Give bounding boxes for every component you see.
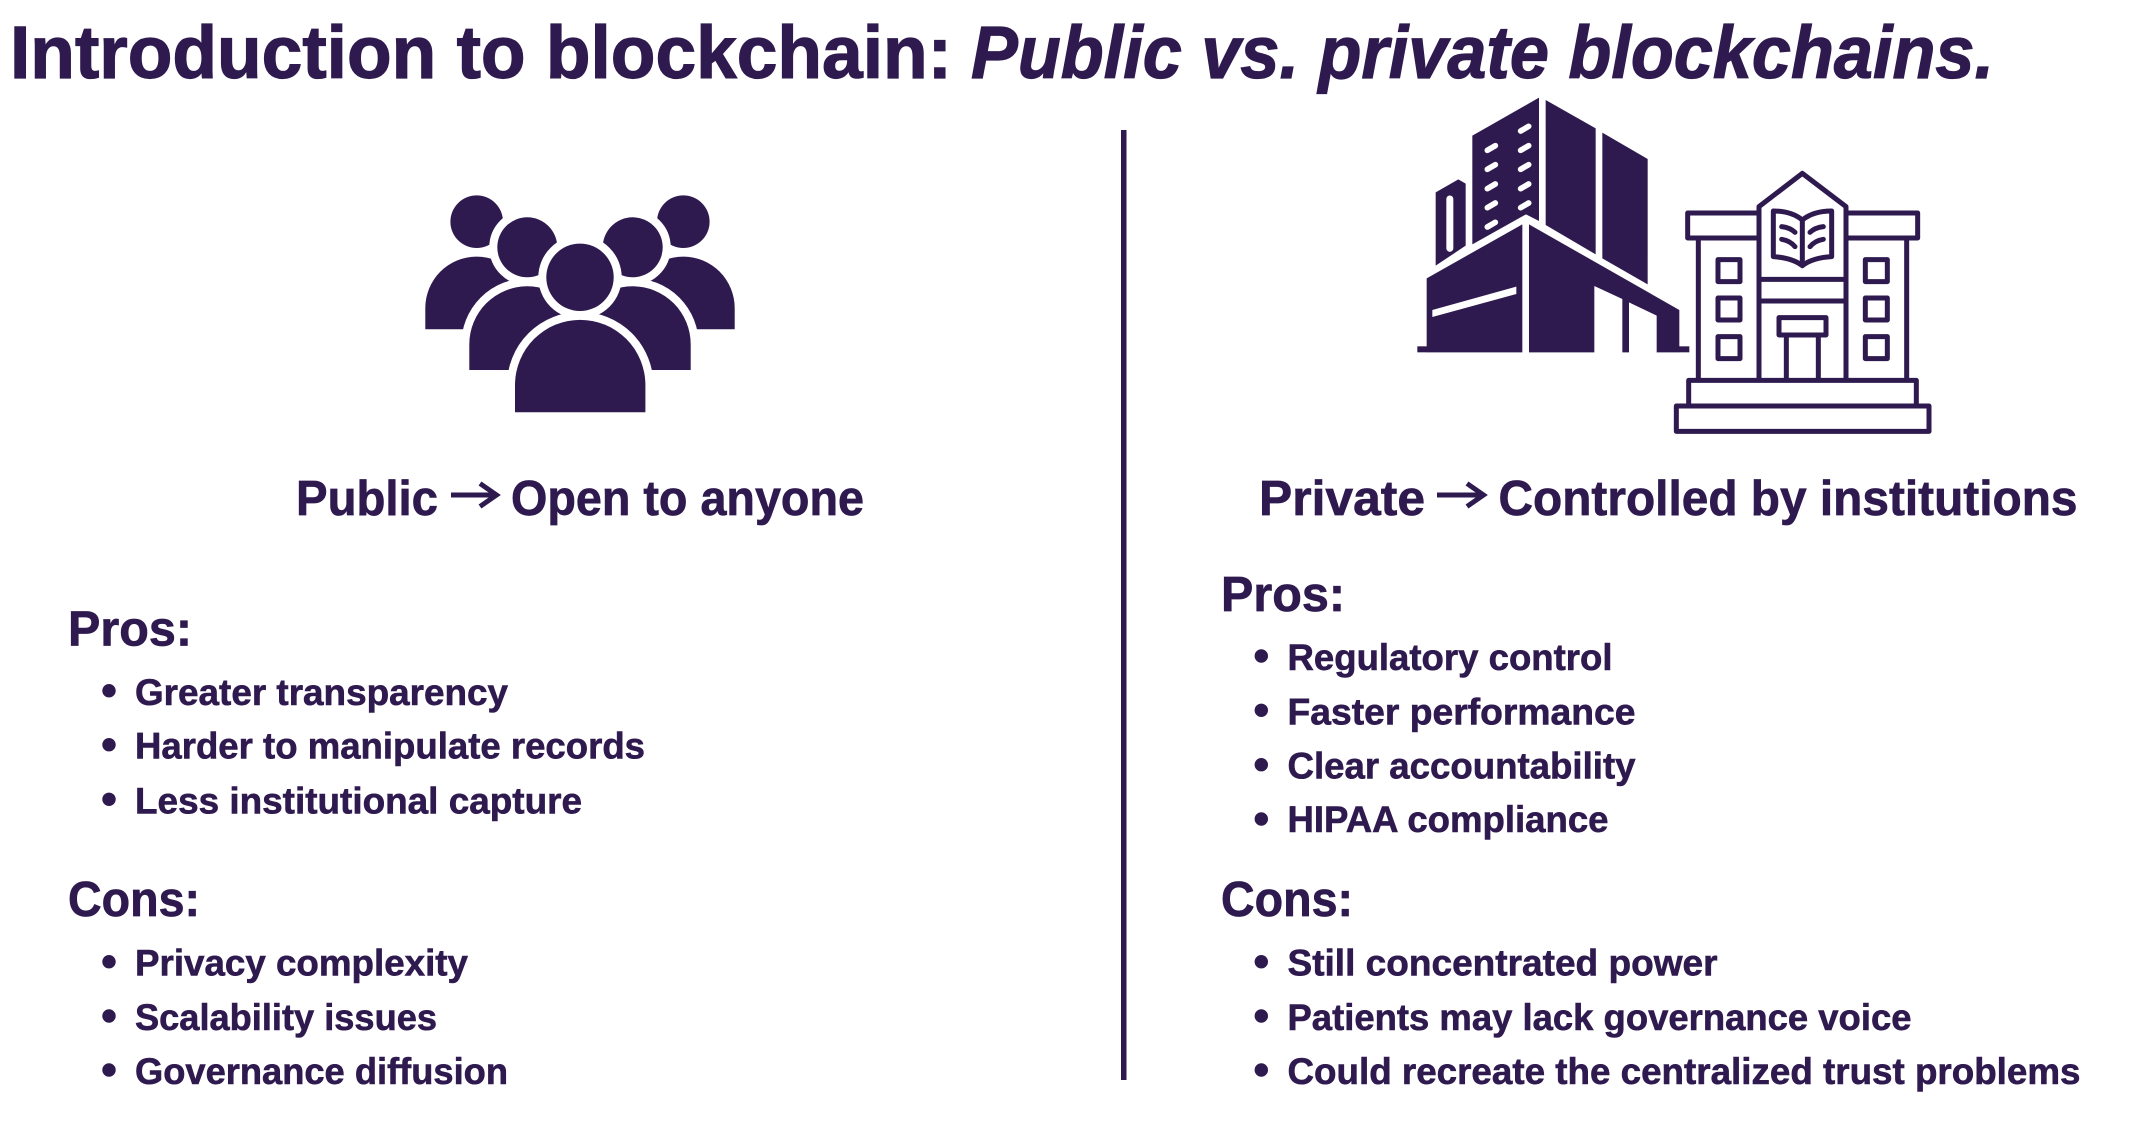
heading: private controlled by institutions	[1259, 472, 2078, 526]
pros list: HIPAA compliance	[1288, 799, 1608, 840]
cons list: Patients may lack governance voice	[1288, 997, 1912, 1038]
cons list	[102, 943, 508, 1092]
pros list: Clear accountability	[1288, 746, 1636, 787]
title: Introduction to blockchain:	[10, 11, 952, 94]
icon: arrow	[1437, 484, 1484, 506]
title	[10, 11, 1994, 94]
icon: corporate building	[1417, 98, 1689, 352]
pros heading: Pros:	[68, 602, 192, 656]
cons list	[1255, 943, 2080, 1092]
pros list: Regulatory control	[1288, 637, 1612, 678]
pros list: Greater transparency	[135, 672, 508, 713]
pros heading: Pros:	[1221, 568, 1345, 622]
title: Public vs. private blockchains.	[971, 11, 1994, 94]
panel: public blockchains	[68, 195, 864, 1092]
cons list: Privacy complexity	[135, 943, 468, 984]
heading: private controlled by institutions: Private	[1259, 472, 1425, 526]
heading: public open to anyone	[296, 472, 864, 526]
pros list	[102, 672, 645, 822]
cons list: Could recreate the centralized trust problems	[1288, 1051, 2080, 1092]
icon: group of people	[425, 195, 735, 412]
pros list: Faster performance	[1288, 691, 1636, 732]
cons list: Still concentrated power	[1288, 943, 1718, 984]
cons heading: Cons:	[68, 873, 200, 927]
cons list: Scalability issues	[135, 997, 437, 1038]
heading: private controlled by institutions: Controlled by institutions	[1498, 472, 2078, 526]
icon: arrow	[451, 484, 496, 506]
heading: public open to anyone: Open to anyone	[511, 472, 864, 526]
cons list: Governance diffusion	[135, 1051, 508, 1092]
pros list: Less institutional capture	[135, 780, 582, 822]
center divider line	[1121, 130, 1126, 1080]
pros list	[1255, 637, 1636, 840]
icon: institution with book	[1676, 173, 1929, 431]
cons heading: Cons:	[1221, 873, 1353, 927]
pros list: Harder to manipulate records	[135, 726, 645, 766]
panel: private blockchains	[1221, 98, 2080, 1092]
heading: public open to anyone: Public	[296, 472, 438, 526]
